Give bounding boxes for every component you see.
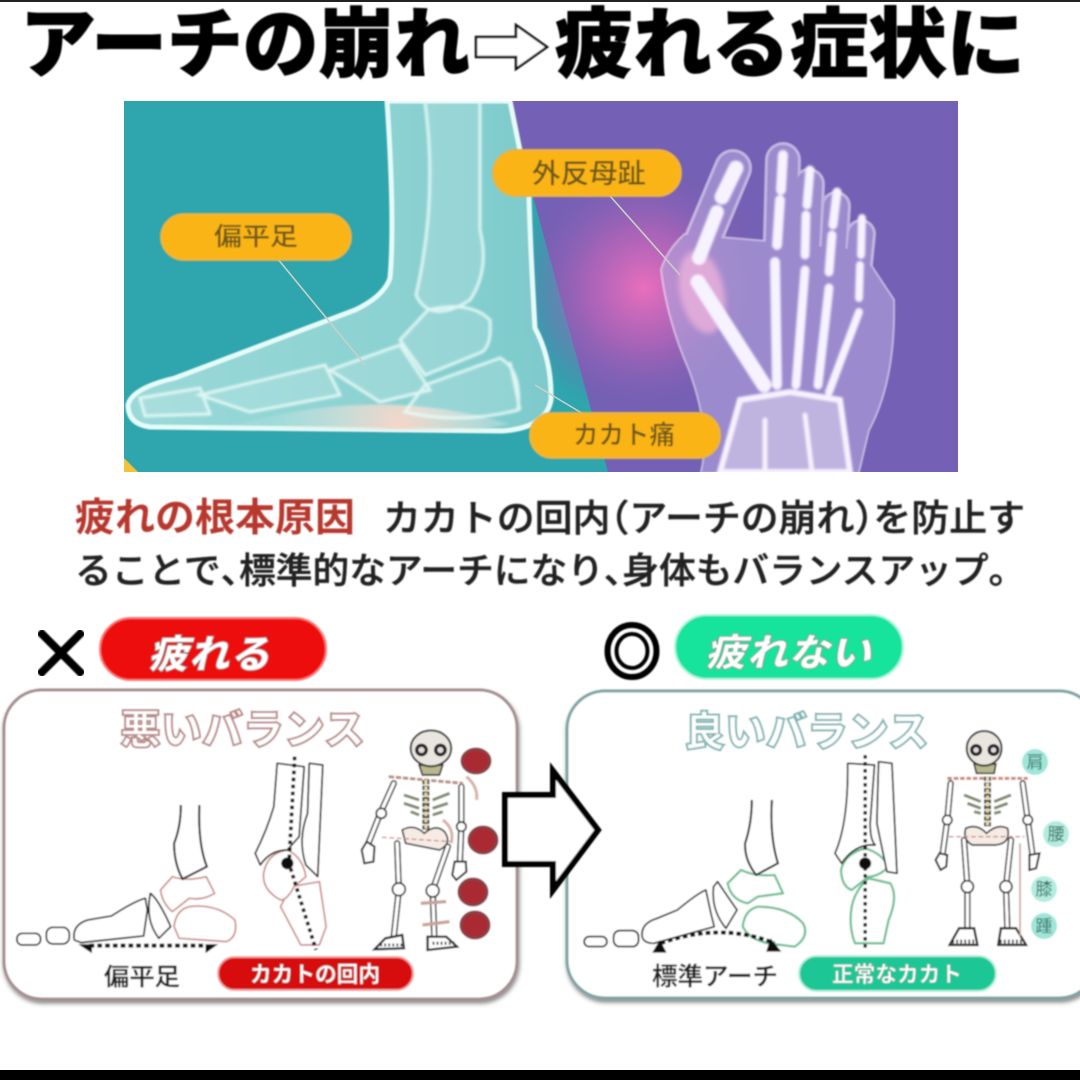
illustration: straight skeleton <box>936 731 1039 945</box>
title arrow <box>476 25 547 69</box>
title <box>20 3 1025 88</box>
marker: heel: 踵 <box>1036 917 1052 936</box>
illustration: pronated heel <box>255 757 326 950</box>
explanatory text <box>75 497 1025 591</box>
leader lines <box>277 196 680 415</box>
illustration: normal heel <box>835 755 897 950</box>
marker: waist: 腰 <box>1048 825 1064 844</box>
illustration: tilted skeleton <box>362 730 477 950</box>
pill: カカトの回内 <box>218 957 413 990</box>
panel: foot illustration <box>124 101 958 472</box>
panel: good balance <box>567 691 1080 998</box>
marker: waist <box>1043 821 1069 847</box>
yellow corner <box>124 458 138 472</box>
heading: 悪いバランス: 悪いバランス <box>120 707 365 753</box>
line 1: カカトの回内（アーチの崩れ）を防止す <box>383 498 1025 539</box>
badge: 疲れない: 疲れない <box>703 633 879 675</box>
label: 偏平足 <box>161 214 351 260</box>
title: アーチの崩れ <box>20 3 470 88</box>
caption: 偏平足: 偏平足 <box>104 964 180 991</box>
panel: bad balance <box>4 690 517 999</box>
icon: cross mark <box>42 634 80 672</box>
pain markers <box>459 749 497 938</box>
caption: 標準アーチ: 標準アーチ <box>652 963 778 991</box>
illustration: flat foot bones <box>17 805 236 953</box>
body markers <box>1022 749 1069 939</box>
bottom bar <box>0 1070 1080 1080</box>
marker: shoulder <box>1022 749 1048 775</box>
marker: heel <box>1031 913 1057 939</box>
label: カカト痛 <box>530 413 720 458</box>
teal background <box>124 101 608 472</box>
heading: 良いバランス: 良いバランス <box>684 709 929 755</box>
title: 疲れる症状に <box>555 3 1025 88</box>
badge: 疲れない <box>675 615 903 679</box>
flat foot side view <box>128 101 551 431</box>
label: 偏平足: 偏平足 <box>214 223 298 251</box>
marker: knee: 膝 <box>1036 880 1052 899</box>
pink glow <box>534 192 730 394</box>
arrow between panels <box>505 771 598 890</box>
label: 外反母趾: 外反母趾 <box>532 159 646 189</box>
top edge line <box>0 0 1080 2</box>
pill: 正常なカカト: 正常なカカト <box>832 962 962 987</box>
pill: 正常なカカト <box>799 956 996 991</box>
marker: knee <box>1031 876 1057 902</box>
badge: 疲れる: 疲れる <box>146 634 279 677</box>
red lead phrase: 疲れの根本原因 <box>75 497 355 540</box>
illustration: normal arch bones <box>584 800 805 953</box>
label: 外反母趾 <box>493 150 681 196</box>
pill: カカトの回内: カカトの回内 <box>250 962 380 987</box>
badge: 疲れる <box>100 618 326 680</box>
line 2: ることで、標準的なアーチになり、身体もバランスアップ。 <box>75 550 1007 591</box>
marker: shoulder: 肩 <box>1026 753 1044 772</box>
label: カカト痛: カカト痛 <box>573 420 675 450</box>
icon: double circle <box>608 625 656 677</box>
bunion foot top view <box>662 155 893 472</box>
purple background <box>507 101 958 472</box>
